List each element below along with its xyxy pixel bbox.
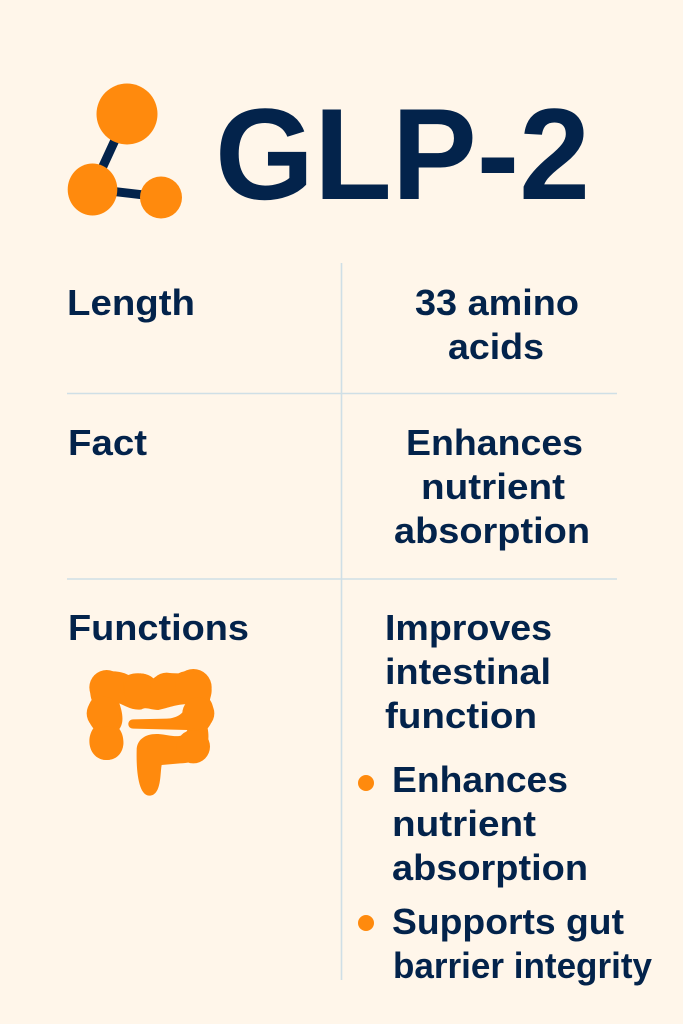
value: improves intestinal function: function: [385, 695, 537, 736]
bullet: supports gut barrier integrity: [358, 901, 652, 986]
value: enhances nutrient absorption: nutrient: [421, 466, 565, 507]
value: enhances nutrient absorption: [394, 422, 590, 551]
row: functions: [68, 607, 652, 986]
label: length: Length: [67, 282, 195, 323]
bullet: supports gut barrier integrity: Supports gut: [392, 901, 624, 942]
value: 33 amino acids: 33 amino: [415, 282, 579, 323]
row: length: [67, 282, 579, 367]
row: fact: [68, 422, 590, 551]
bullet: supports gut barrier integrity: barrier integrity: [393, 945, 652, 986]
value: 33 amino acids: acids: [448, 326, 544, 367]
value: 33 amino acids: [415, 282, 579, 367]
value: enhances nutrient absorption: absorption: [394, 510, 590, 551]
icon: intestine: [87, 669, 214, 796]
bullet: enhances nutrient absorption: Enhances: [392, 759, 568, 800]
value: improves intestinal function: [385, 607, 552, 736]
bullet: enhances nutrient absorption: [358, 759, 588, 888]
bullet: enhances nutrient absorption: absorption: [392, 847, 588, 888]
title: GLP-2: [215, 81, 590, 227]
value: improves intestinal function: Improves: [385, 607, 552, 648]
value: improves intestinal function: intestinal: [385, 651, 551, 692]
label: functions: Functions: [68, 607, 249, 648]
label: fact: Fact: [68, 422, 147, 463]
bullet: enhances nutrient absorption: nutrient: [392, 803, 536, 844]
icon: molecule: [68, 84, 182, 218]
value: enhances nutrient absorption: Enhances: [406, 422, 583, 463]
